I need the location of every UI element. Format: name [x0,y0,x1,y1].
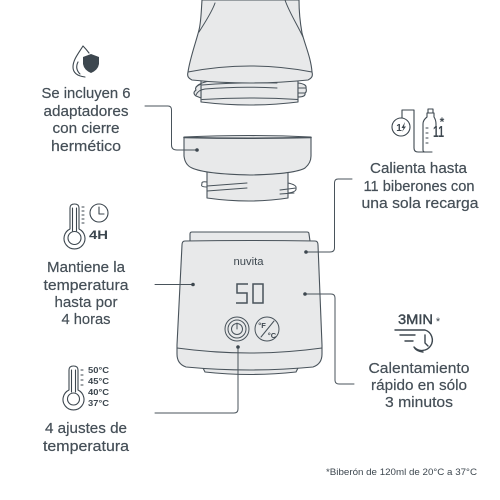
bottle [188,0,312,105]
temperature display: 50 [236,284,263,303]
text: keeps temperature: hasta por [54,294,118,311]
icon: thermometer with 4 temperatures: 50°C [88,365,109,375]
icon: 3 minutes fast clock [395,312,441,352]
icon: thermometer with clock 4H: 4H [89,228,108,242]
icon: battery and bottle 11: 1 [396,123,402,134]
text: keeps temperature [44,259,129,328]
text: recharge: Calienta hasta [370,160,468,177]
text: adapters [42,85,130,155]
text: temperature settings: temperatura [43,438,130,455]
leader line: keeps temperature [155,283,195,286]
text: keeps temperature: 4 horas [62,311,110,328]
text: fast heating: rápido en sólo [371,377,467,394]
leader line: fast heating [303,292,354,384]
text: fast heating [368,360,470,411]
text: adapters: hermético [51,138,121,155]
text: recharge [362,160,479,212]
power button [225,317,249,341]
unit button [255,317,279,341]
logo: nuvita: nuvita [234,256,264,268]
text: temperature settings: 4 ajustes de [45,420,127,437]
text: keeps temperature: Mantiene la [47,259,126,276]
text: adapters: adaptadores [44,103,128,120]
icon: thermometer with clock 4H [64,204,108,249]
text: recharge: 11 biberones con [364,178,474,195]
icon: 3 minutes fast clock: * [436,316,441,328]
leader line: temperature settings [155,345,240,413]
icon: battery and bottle 11 [392,109,445,152]
icon: thermometer with 4 temperatures [63,365,109,410]
icon: battery and bottle 11: * [440,115,445,129]
text: adapters: con cierre [52,120,120,137]
unit button: °F [258,321,266,330]
text: recharge: una sola recarga [362,195,479,212]
icon: thermometer with 4 temperatures: 45°C [88,376,109,386]
footnote: *Biberón de 120ml de 20°C a 37°C [326,467,477,478]
icon: drop with shield [73,46,99,77]
leader line: recharge [304,179,352,254]
text: adapters: Se incluyen 6 [42,85,130,102]
text: keeps temperature: temperatura [44,277,129,294]
leader line: adapter [145,106,199,152]
unit button: °C [268,331,277,340]
adapter [184,136,311,201]
text: fast heating: 3 minutos [385,394,453,411]
text: temperature settings [43,420,130,455]
icon: battery and bottle 11: 11 [433,124,444,141]
warmer device [177,232,322,374]
text: fast heating: Calentamiento [368,360,470,377]
icon: thermometer with 4 temperatures: 37°C [88,398,109,408]
icon: thermometer with 4 temperatures: 40°C [88,387,109,397]
icon: 3 minutes fast clock: 3MIN [398,312,433,327]
